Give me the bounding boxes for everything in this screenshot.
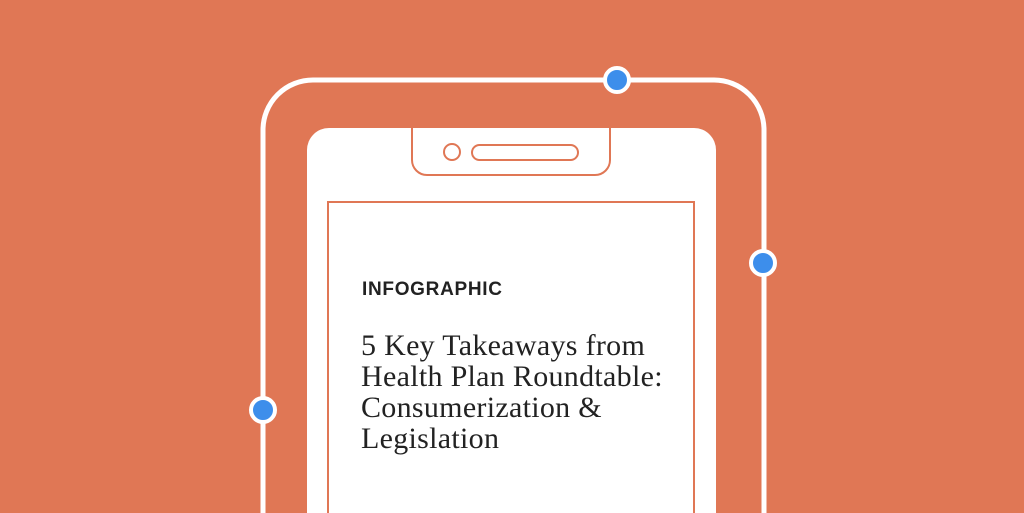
dot right [751, 251, 775, 275]
notch [412, 128, 610, 175]
title [361, 329, 663, 455]
camera [444, 144, 460, 160]
dot left [251, 398, 275, 422]
label: INFOGRAPHIC: INFOGRAPHIC [362, 279, 503, 300]
speaker [472, 145, 578, 160]
title: 5 Key Takeaways from [361, 329, 645, 362]
title: Consumerization & [361, 391, 602, 424]
outer phone outline [263, 80, 764, 513]
screen [328, 202, 694, 513]
phone body [307, 128, 716, 513]
title: Legislation [361, 422, 499, 455]
dot top [605, 68, 629, 92]
title: Health Plan Roundtable: [361, 360, 663, 393]
